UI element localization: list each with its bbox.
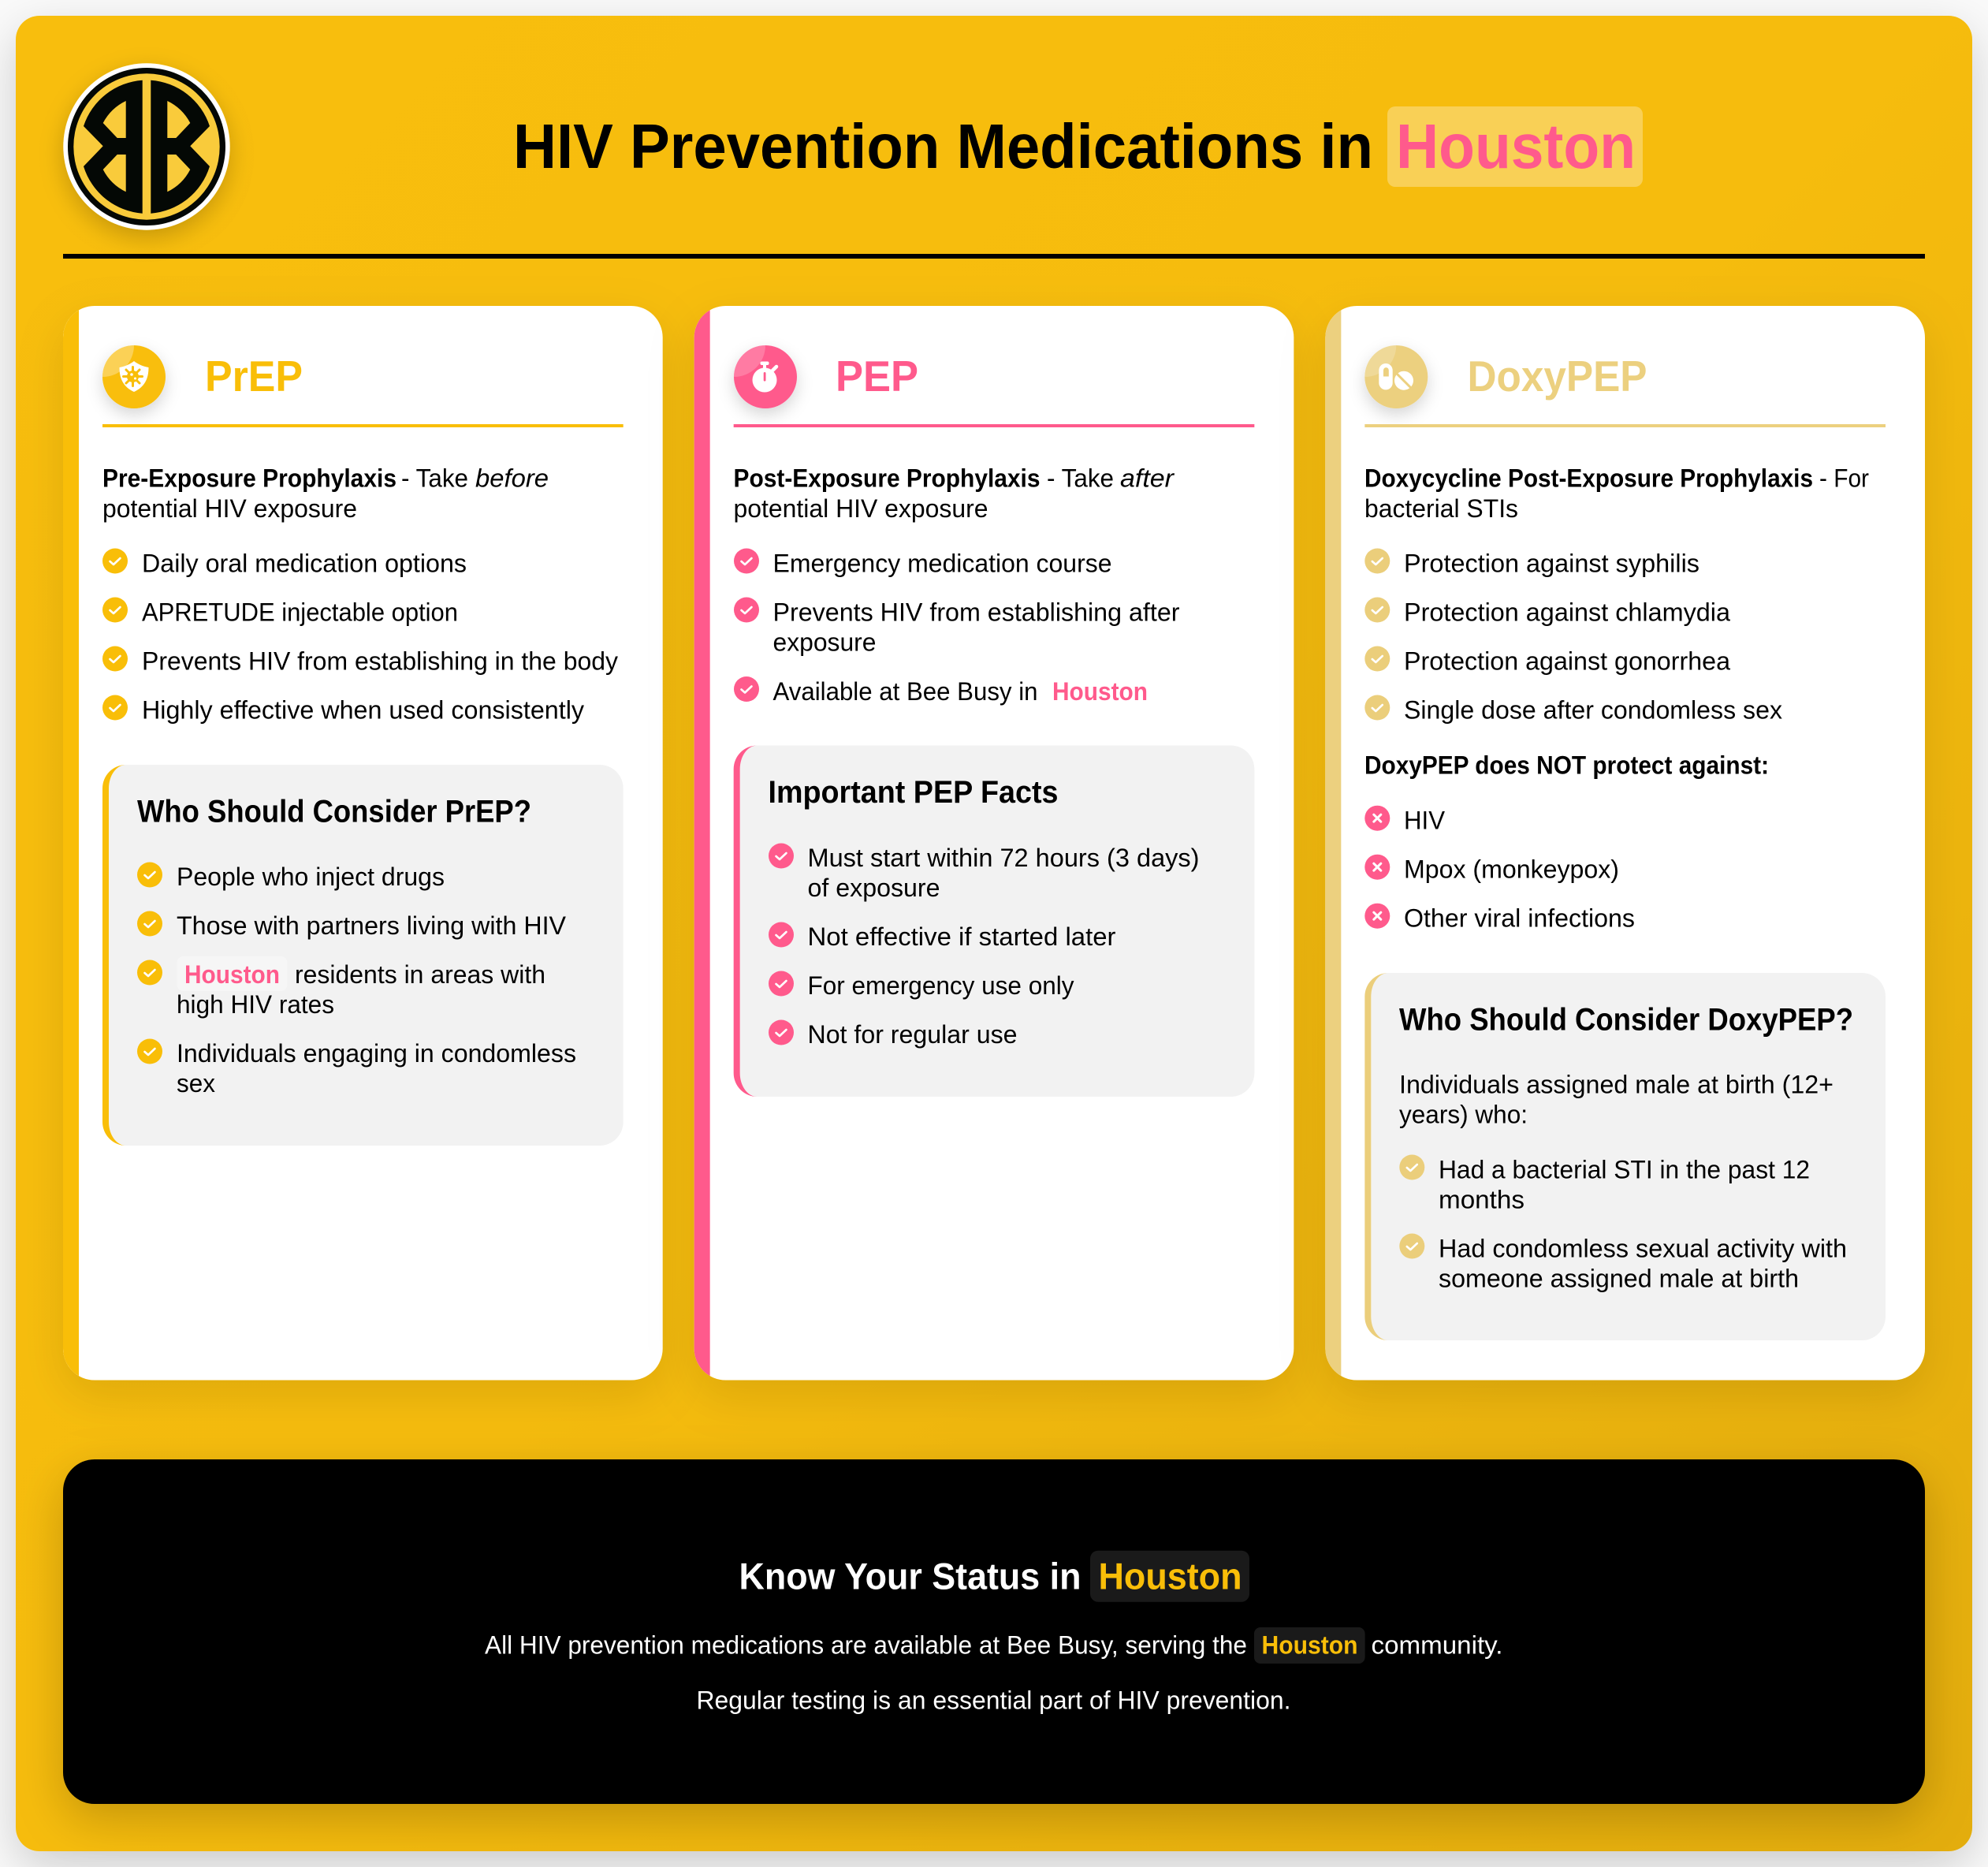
intro text: potential HIV exposure	[733, 494, 988, 523]
list: PEP features: exposure	[772, 628, 877, 656]
callout: important PEP facts: of exposure	[807, 874, 940, 902]
heading: DoxyPEP: DoxyPEP	[1468, 352, 1647, 401]
footer panel	[63, 1459, 1925, 1804]
title: HIV Prevention Medications in	[513, 111, 1373, 181]
callout: who should consider DoxyPEP: someone assigned male at birth	[1439, 1265, 1799, 1293]
list: does not protect: HIV	[1404, 806, 1446, 834]
heading: PEP: PEP	[836, 352, 918, 401]
callout: who should consider DoxyPEP	[1364, 973, 1886, 1340]
intro text	[102, 464, 549, 523]
callout: who should consider PrEP: Who Should Consider PrEP?	[137, 795, 531, 829]
callout: who should consider DoxyPEP: Who Should Consider DoxyPEP?	[1399, 1003, 1853, 1038]
callout: important PEP facts	[734, 746, 1254, 1097]
panel: DoxyPEP	[1325, 306, 1925, 1380]
list: DoxyPEP protections: Protection against syphilis	[1404, 549, 1699, 577]
icon: pills	[1364, 345, 1428, 408]
callout: who should consider PrEP: sex	[177, 1069, 215, 1097]
intro text: potential HIV exposure	[102, 494, 357, 523]
list: PrEP features: Prevents HIV from establishing in the body	[142, 647, 618, 675]
footer heading: Houston	[1099, 1556, 1242, 1597]
list: DoxyPEP protections	[1364, 549, 1782, 724]
intro text: bacterial STIs	[1364, 494, 1518, 523]
callout: who should consider PrEP: high HIV rates	[177, 990, 334, 1019]
footer heading: Know Your Status in	[739, 1556, 1081, 1597]
callout: who should consider PrEP: People who inject drugs	[177, 863, 445, 891]
warning heading: DoxyPEP does NOT protect against:	[1364, 751, 1769, 779]
intro text	[1364, 464, 1869, 523]
title	[513, 106, 1643, 187]
list: PrEP features	[102, 549, 618, 724]
intro text	[733, 464, 1175, 523]
list: PEP features: Prevents HIV from establishing after	[772, 598, 1180, 626]
intro text: - For	[1819, 464, 1869, 492]
footer text: Houston	[1261, 1630, 1357, 1659]
callout: important PEP facts: Not effective if started later	[807, 922, 1116, 951]
list: does not protect: Other viral infections	[1404, 904, 1635, 932]
callout: who should consider DoxyPEP: Had a bacterial STI in the past 12	[1439, 1156, 1810, 1184]
callout: who should consider PrEP: residents in areas with	[295, 960, 545, 989]
list: does not protect: Mpox (monkeypox)	[1404, 855, 1619, 883]
logo	[63, 63, 230, 230]
callout: important PEP facts: Not for regular use	[807, 1020, 1017, 1049]
header	[63, 63, 1643, 230]
callout: who should consider PrEP: Those with partners living with HIV	[177, 911, 567, 940]
list: PrEP features: Daily oral medication options	[142, 549, 467, 577]
footer heading	[739, 1551, 1249, 1602]
callout: who should consider PrEP: Individuals engaging in condomless	[177, 1039, 576, 1068]
callout: important PEP facts: For emergency use only	[807, 971, 1074, 1000]
callout: important PEP facts: Important PEP Facts	[768, 775, 1058, 810]
list: does not protect	[1364, 806, 1635, 932]
list: PEP features: Emergency medication course	[772, 549, 1111, 577]
footer text: All HIV prevention medications are available at Bee Busy, serving the	[485, 1630, 1247, 1659]
intro text: Post-Exposure Prophylaxis	[733, 464, 1041, 492]
footer text	[485, 1627, 1502, 1714]
intro text: before	[475, 464, 549, 492]
callout: who should consider PrEP	[102, 765, 624, 1146]
title: Houston	[1396, 111, 1636, 181]
intro text: Doxycycline Post-Exposure Prophylaxis	[1364, 464, 1813, 492]
list: DoxyPEP protections: Protection against gonorrhea	[1404, 647, 1730, 675]
list: DoxyPEP protections: Protection against chlamydia	[1404, 598, 1730, 626]
intro text: after	[1120, 464, 1175, 492]
callout: who should consider DoxyPEP: Had condomless sexual activity with	[1439, 1235, 1847, 1263]
panel: PEP	[694, 306, 1294, 1380]
callout: who should consider PrEP: Houston	[184, 960, 280, 989]
list: PEP features: Houston	[1052, 677, 1148, 706]
footer text: Regular testing is an essential part of HIV prevention.	[697, 1686, 1291, 1714]
callout: who should consider DoxyPEP: Individuals assigned male at birth (12+	[1399, 1071, 1834, 1099]
list: PEP features: Available at Bee Busy in	[772, 677, 1037, 706]
callout: who should consider DoxyPEP: months	[1439, 1186, 1525, 1214]
callout: who should consider DoxyPEP: years) who:	[1399, 1101, 1528, 1129]
list: PrEP features: APRETUDE injectable option	[142, 598, 458, 626]
callout: important PEP facts: Must start within 72 hours (3 days)	[807, 844, 1200, 872]
panel: PrEP	[63, 306, 663, 1380]
list: PEP features	[734, 549, 1180, 706]
footer text: community.	[1372, 1630, 1502, 1659]
icon: shield virus	[102, 345, 166, 408]
list: DoxyPEP protections: Single dose after condomless sex	[1404, 695, 1782, 724]
intro text: Pre-Exposure Prophylaxis	[102, 464, 396, 492]
icon: stopwatch	[734, 345, 797, 408]
heading: PrEP: PrEP	[205, 352, 303, 401]
intro text: - Take	[401, 464, 468, 492]
list: PrEP features: Highly effective when used consistently	[142, 695, 584, 724]
intro text: - Take	[1047, 464, 1114, 492]
